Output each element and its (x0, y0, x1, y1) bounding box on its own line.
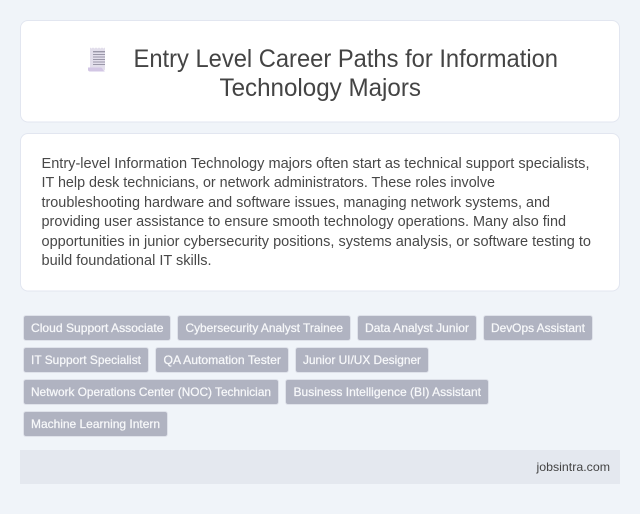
tag: QA Automation Tester: QA Automation Tester (164, 353, 281, 367)
tag: IT Support Specialist (24, 348, 148, 372)
text block: description: IT help desk technicians, or network administrators. These roles involve (42, 175, 495, 191)
tag: Business Intelligence (BI) Assistant (286, 380, 488, 404)
tag: Network Operations Center (NOC) Technician: Network Operations Center (NOC) Technician (31, 385, 271, 399)
text block: description (42, 156, 591, 269)
tag: Cybersecurity Analyst Trainee: Cybersecurity Analyst Trainee (186, 321, 343, 335)
text block: description: providing user assistance to ensure smooth technology operations. Many also find (42, 214, 566, 230)
tag: IT Support Specialist: IT Support Specialist (31, 353, 142, 367)
tag: Cloud Support Associate (24, 316, 170, 340)
footer bar (20, 450, 620, 484)
tag: Junior UI/UX Designer (296, 348, 428, 372)
tag: Cloud Support Associate: Cloud Support Associate (31, 321, 164, 335)
tag: Cybersecurity Analyst Trainee (178, 316, 350, 340)
text block: description: build foundational IT skills. (42, 253, 212, 269)
tag: Data Analyst Junior: Data Analyst Junior (365, 321, 469, 335)
tag: Business Intelligence (BI) Assistant: Business Intelligence (BI) Assistant (294, 385, 482, 399)
tag: DevOps Assistant (484, 316, 592, 340)
title: Technology Majors (220, 74, 421, 102)
tag: Data Analyst Junior (358, 316, 476, 340)
text block: description: opportunities in junior cybersecurity positions, systems analysis, or software testing to (42, 234, 591, 250)
text block: description: troubleshooting hardware and software issues, managing network systems, and (42, 195, 550, 211)
tag: Network Operations Center (NOC) Technician (24, 380, 278, 404)
tag: Machine Learning Intern: Machine Learning Intern (31, 417, 160, 431)
tag list (24, 316, 592, 436)
tag: Junior UI/UX Designer: Junior UI/UX Designer (303, 353, 421, 367)
tag: QA Automation Tester (156, 348, 288, 372)
tag: DevOps Assistant: DevOps Assistant (491, 321, 586, 335)
panel: header card (20, 20, 620, 122)
text block: description: Entry-level Information Technology majors often start as technical support specialists, (42, 156, 590, 172)
footer: source: jobsintra.com (535, 460, 610, 474)
title (134, 45, 558, 102)
icon: document scroll (88, 48, 105, 72)
panel: description card (20, 134, 620, 291)
title: Entry Level Career Paths for Information (134, 45, 558, 73)
tag: Machine Learning Intern (24, 412, 168, 436)
